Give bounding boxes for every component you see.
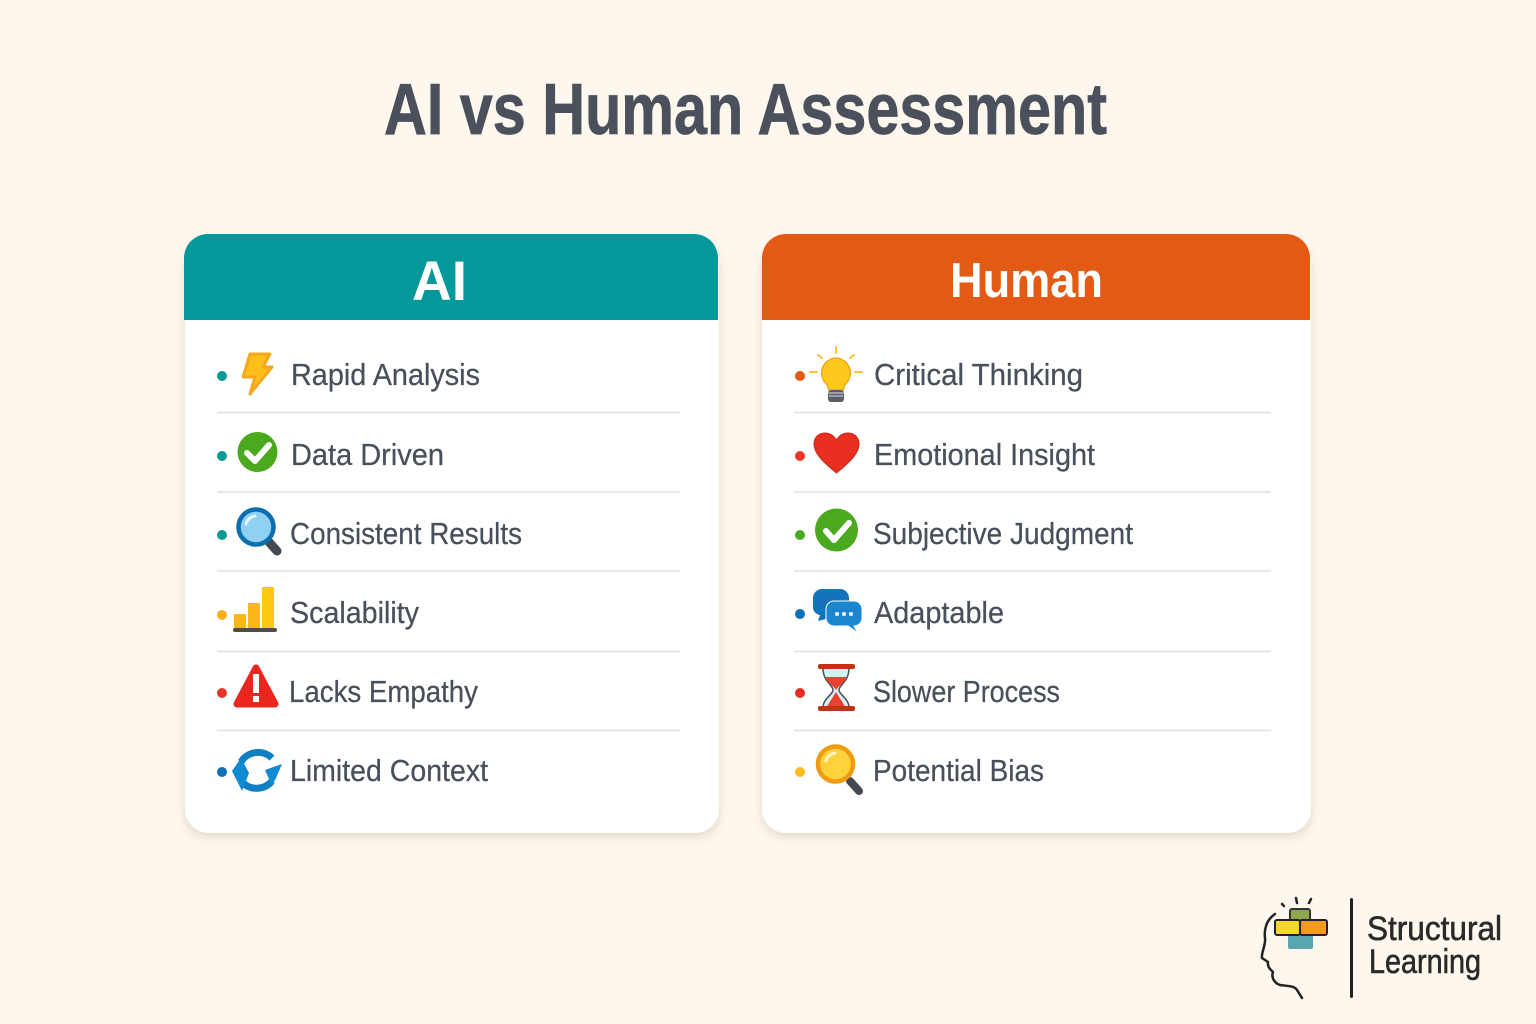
icon: check circle <box>815 508 858 552</box>
item: Limited Context: Limited Context <box>290 753 488 788</box>
panel: Human <box>762 234 1311 833</box>
AI header: AI <box>412 249 467 312</box>
icon: yellow magnifier <box>818 746 859 791</box>
icon: bar chart <box>233 587 277 632</box>
icon: warning triangle <box>237 668 275 704</box>
item: Potential Bias: Potential Bias <box>873 753 1044 788</box>
icon: refresh arrows <box>232 752 282 791</box>
item: Subjective Judgment: Subjective Judgment <box>873 516 1133 551</box>
item: Subjective Judgment <box>795 508 1133 552</box>
item: Slower Process: Slower Process <box>873 674 1060 709</box>
icon: head with blocks <box>1262 898 1327 998</box>
logo wordmark <box>1367 910 1502 981</box>
item: Lacks Empathy: Lacks Empathy <box>289 674 478 709</box>
item: Lacks Empathy <box>217 668 478 709</box>
AI header <box>184 234 718 320</box>
dividers <box>217 412 680 730</box>
item: Limited Context <box>217 752 488 791</box>
item: Rapid Analysis: Rapid Analysis <box>291 357 480 392</box>
item: Scalability: Scalability <box>290 595 419 630</box>
item: Scalability <box>217 587 419 632</box>
icon: speech bubbles <box>813 589 862 633</box>
item: Potential Bias <box>795 746 1044 791</box>
item: Slower Process <box>795 664 1060 711</box>
Human header: Human <box>950 254 1103 308</box>
icon: blue magnifier <box>238 510 277 551</box>
item: Data Driven <box>217 432 444 472</box>
logo divider <box>1350 898 1353 998</box>
icon: heart <box>814 433 859 473</box>
item: Critical Thinking: Critical Thinking <box>874 357 1083 392</box>
icon: light bulb <box>810 347 862 402</box>
icon: check circle <box>238 432 278 472</box>
Human header <box>762 234 1310 320</box>
title: AI vs Human Assessment <box>384 70 1107 150</box>
item: Adaptable <box>795 589 1004 633</box>
item: Adaptable: Adaptable <box>874 595 1004 630</box>
logo wordmark: Structural <box>1367 910 1502 948</box>
item: Critical Thinking <box>795 347 1083 402</box>
item: Consistent Results <box>217 510 522 551</box>
item: Consistent Results: Consistent Results <box>290 516 522 551</box>
icon: hourglass <box>818 664 855 711</box>
item: Rapid Analysis <box>217 354 480 394</box>
logo: Structural Learning <box>1262 898 1502 998</box>
dividers <box>794 412 1271 730</box>
logo wordmark: Learning <box>1369 943 1481 981</box>
item: Emotional Insight <box>795 433 1095 473</box>
item: Emotional Insight: Emotional Insight <box>874 437 1095 472</box>
panel: AI <box>184 234 719 833</box>
item: Data Driven: Data Driven <box>291 437 444 472</box>
icon: lightning bolt <box>243 354 272 394</box>
